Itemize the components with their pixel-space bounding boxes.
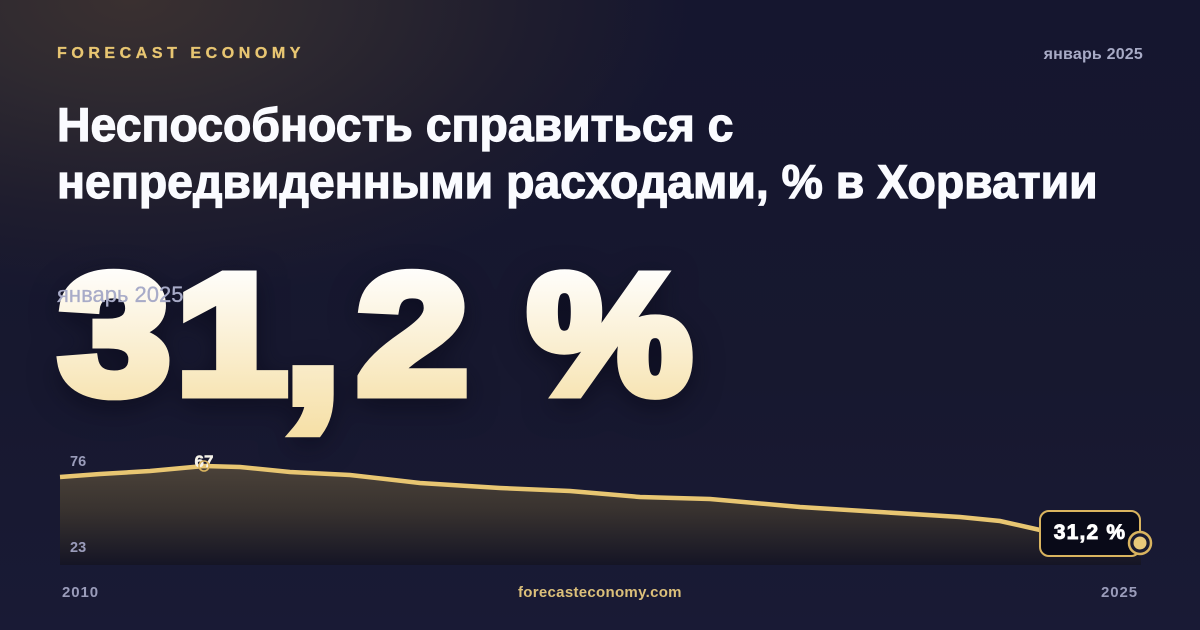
peak marker [199, 461, 209, 471]
title: Неспособность справиться с [57, 98, 733, 151]
callout badge: 31,2 % [1054, 521, 1126, 544]
big value: 2 [357, 240, 468, 430]
big value [56, 230, 693, 442]
axis max label: 76 [70, 454, 86, 470]
callout badge [1040, 511, 1140, 556]
big value: 31 [59, 240, 287, 430]
big value: % [528, 239, 692, 429]
source url: forecasteconomy.com [518, 584, 682, 601]
end year: 2025 [1101, 584, 1138, 601]
date subtitle overlapping value: январь 2025 [57, 282, 184, 307]
end marker [1129, 532, 1151, 554]
start year: 2010 [62, 584, 99, 601]
axis min label: 23 [70, 540, 86, 556]
brand label: FORECAST ECONOMY [57, 45, 305, 62]
chart line [60, 466, 1141, 543]
peak value: 67 [195, 452, 213, 471]
title: непредвиденными расходами, % в Хорватии [57, 155, 1098, 208]
chart area fill [60, 466, 1141, 565]
title [57, 98, 1098, 209]
date top right: январь 2025 [1044, 46, 1143, 63]
area chart [60, 452, 1152, 565]
big value: , [285, 230, 341, 442]
